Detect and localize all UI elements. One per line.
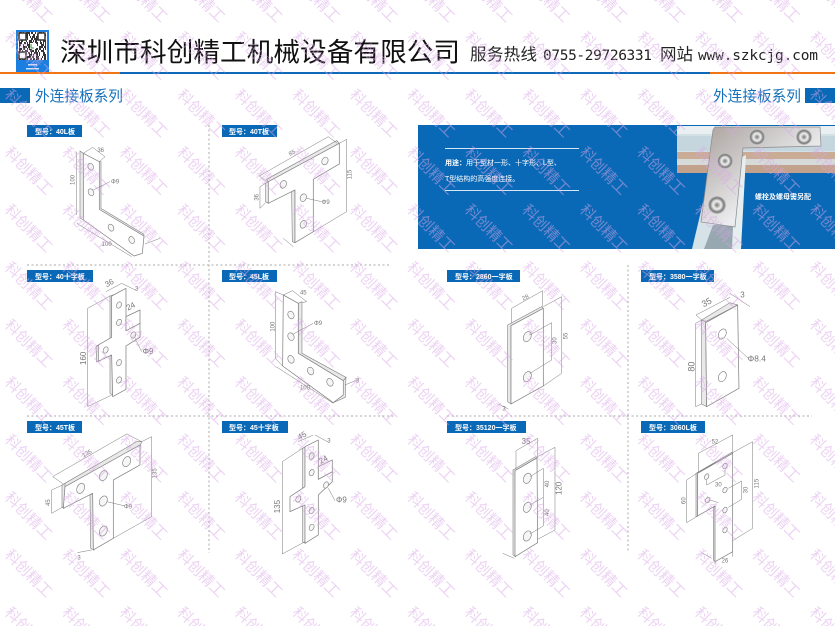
usage text <box>445 148 579 191</box>
drawing: 3060L plate: 115 <box>754 478 760 488</box>
label: 35120: 型号：35120一字板 <box>455 423 516 432</box>
drawing: 40L plate: 100 <box>71 174 77 185</box>
drawing: 3580 straight plate: 80 <box>686 362 696 372</box>
drawing: 40T plate <box>255 137 353 247</box>
drawing: 3060L plate: 30 <box>743 486 749 493</box>
drawing: 45 cross plate: 24 <box>317 453 330 466</box>
drawing: 45 cross plate: 135 <box>273 499 282 513</box>
contact line: www.szkcjg.com <box>698 48 818 64</box>
drawing: 45L plate: 45 <box>300 291 307 297</box>
drawing: 2860 straight plate <box>498 291 570 413</box>
drawing: 40 cross plate <box>79 277 154 407</box>
drawing: 3060L plate: 26 <box>722 559 729 565</box>
company title: 深圳市科创精工机械设备有限公司 <box>60 30 460 70</box>
drawing: 2860 straight plate: 3 <box>502 407 506 413</box>
drawing: 35120 straight plate: 40 <box>545 480 551 487</box>
drawing: 3580 straight plate: Φ8.4 <box>748 353 766 363</box>
drawing: 3060L plate: 30 <box>715 483 722 489</box>
drawing: 35120 straight plate: 120 <box>555 481 564 495</box>
drawing: 45T plate: 3 <box>77 555 81 561</box>
drawing: 35120 straight plate: 40 <box>545 509 551 516</box>
contact line: 0755-29726331 <box>543 48 652 64</box>
drawing: 40 cross plate: Φ9 <box>143 347 154 356</box>
drawing: 40L plate: 100 <box>102 242 112 248</box>
drawing: 45T plate: 45 <box>46 499 52 506</box>
drawing: 45 cross plate: Φ9 <box>336 496 347 505</box>
drawing: 40L plate: 36 <box>97 148 105 154</box>
header rule <box>0 72 835 74</box>
drawing: 2860 straight plate: 55 <box>564 332 570 339</box>
drawing: 40 cross plate: 3 <box>135 287 139 293</box>
label: 3060L: 型号：3060L板 <box>649 423 697 432</box>
drawing: 2860 straight plate: 28 <box>521 294 531 302</box>
drawing: 3580 straight plate: 35 <box>700 296 713 309</box>
drawing: 40T plate: 85 <box>288 149 297 158</box>
drawing: 3060L plate: 52 <box>712 439 719 445</box>
drawing: 2860 straight plate: 30 <box>552 337 558 344</box>
dividers <box>27 125 812 553</box>
drawing: 45 cross plate: 3 <box>327 439 331 445</box>
label: 45T <box>27 421 82 433</box>
label: 40 cross <box>27 270 93 282</box>
label: 40L: 型号：40L板 <box>35 127 75 136</box>
drawing: 40L plate: Φ9 <box>111 179 120 185</box>
drawing: 45L plate <box>271 291 360 403</box>
drawing: 45 cross plate <box>273 429 347 554</box>
contact line <box>470 41 818 65</box>
panel: usage with photo <box>418 125 835 249</box>
label: 45T: 型号：45T板 <box>35 423 75 432</box>
drawing: 45 cross plate: 45 <box>296 429 309 442</box>
drawing: 40 cross plate: 24 <box>125 300 137 312</box>
usage text: 用途：用于型材一形、十字形、L型、 <box>445 158 561 167</box>
label: 40 cross: 型号：40十字板 <box>35 272 85 281</box>
photo note: 螺栓及螺母需另配 <box>755 192 811 201</box>
label: 40T <box>222 125 277 137</box>
label: 45 cross: 型号：45十字板 <box>229 423 279 432</box>
label: 40L <box>27 125 82 137</box>
drawing: 45L plate: 100 <box>271 321 277 332</box>
label: 3580: 型号：3580一字板 <box>649 272 707 281</box>
label: 3580 <box>641 270 714 282</box>
drawing: 40T plate: 115 <box>347 169 353 179</box>
drawing: 45L plate: Φ9 <box>314 321 323 327</box>
drawing: 3060L plate: 60 <box>681 497 687 504</box>
label: 2860 <box>447 270 520 282</box>
header QR code <box>16 30 49 72</box>
drawing: 45L plate: 100 <box>300 385 311 391</box>
drawing: 40T plate: 36 <box>255 193 261 201</box>
section heading left: 外连接板系列 <box>35 85 123 106</box>
drawing: 45T plate: 135 <box>153 468 159 478</box>
drawing: 40L plate <box>71 147 160 257</box>
drawing: 45T plate <box>46 434 159 561</box>
label: 3060L <box>641 421 705 433</box>
drawing: 45T plate: 135 <box>81 449 94 459</box>
section heading right: 外连接板系列 <box>713 85 801 106</box>
label: 40T: 型号：40T板 <box>229 127 269 136</box>
drawing: 40 cross plate: 36 <box>103 277 116 289</box>
label: 2860: 型号：2860一字板 <box>455 272 513 281</box>
drawing: 3580 straight plate <box>686 290 766 407</box>
drawing: 45T plate: Φ9 <box>124 504 133 510</box>
drawing: 35120 straight plate: 35 <box>522 437 531 446</box>
drawing: 40T plate: Φ9 <box>322 200 330 206</box>
photo of L plate on aluminium profile <box>677 126 835 249</box>
label: 45L <box>222 270 277 282</box>
label: 45L: 型号：45L板 <box>229 272 269 281</box>
drawing: 3580 straight plate: 3 <box>740 290 745 299</box>
drawing: 35120 straight plate <box>503 437 564 558</box>
contact line: 网站 <box>660 41 693 65</box>
drawing: 40 cross plate: 160 <box>79 351 88 365</box>
contact line: 服务热线 <box>470 41 537 65</box>
label: 45 cross <box>222 421 288 433</box>
label: 35120 <box>447 421 526 433</box>
drawing: 3060L plate <box>681 435 760 565</box>
usage text: T型结构的高强度连接。 <box>445 174 519 183</box>
drawing: 45L plate: 3 <box>356 379 360 385</box>
